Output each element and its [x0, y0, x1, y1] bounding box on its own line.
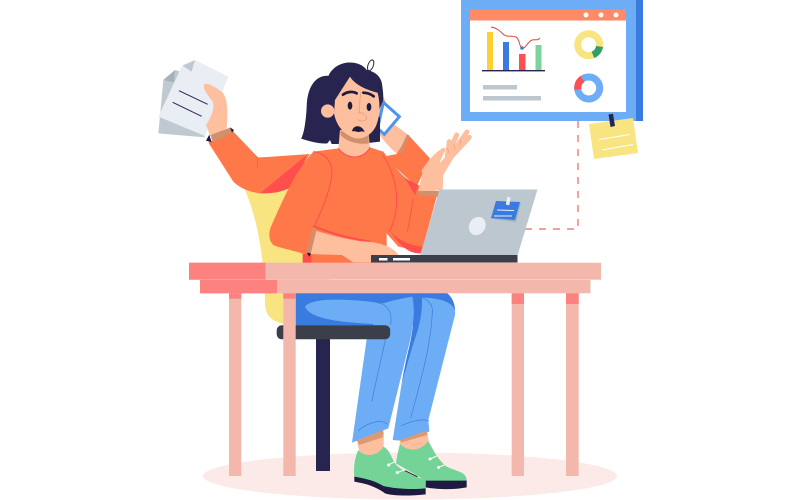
laptop [371, 190, 538, 262]
chair seat [277, 325, 390, 339]
face [334, 77, 379, 138]
text placeholder lines [483, 85, 541, 100]
upper body [158, 59, 469, 263]
bar chart [482, 27, 545, 71]
mouth [352, 127, 364, 132]
hair back [301, 63, 383, 144]
document pages [158, 60, 228, 137]
laptop base [371, 255, 518, 262]
eyes [348, 102, 371, 111]
desk [189, 263, 601, 476]
torso [269, 147, 437, 263]
chair post [316, 339, 330, 471]
sticky note [589, 114, 638, 159]
raised hand [204, 84, 234, 142]
back arm with phone [377, 92, 430, 187]
laptop logo [466, 214, 489, 238]
eyebrows [343, 92, 374, 96]
hair fringe [350, 68, 382, 93]
desk legs [229, 293, 579, 476]
donut chart: yellow [578, 34, 600, 56]
raised arm sleeve [208, 132, 310, 193]
neck [338, 130, 370, 157]
forearm on desk [306, 228, 398, 262]
shoes [354, 441, 467, 495]
panel header [470, 10, 626, 20]
hair highlight [301, 77, 318, 138]
nose [357, 92, 367, 121]
jeans [296, 293, 455, 443]
dashed connector line [522, 121, 578, 229]
phone [378, 102, 399, 134]
ankles [357, 430, 429, 458]
dashboard panel [461, 0, 643, 121]
floor shadow [203, 452, 617, 500]
neck shadow [341, 130, 369, 144]
ear [321, 104, 334, 118]
laptop sticker [491, 197, 521, 222]
donut chart: blue [578, 77, 600, 99]
open hand [417, 132, 469, 197]
chair back [245, 157, 330, 325]
legs and shoes [296, 293, 467, 495]
hair bun loop [366, 59, 375, 72]
